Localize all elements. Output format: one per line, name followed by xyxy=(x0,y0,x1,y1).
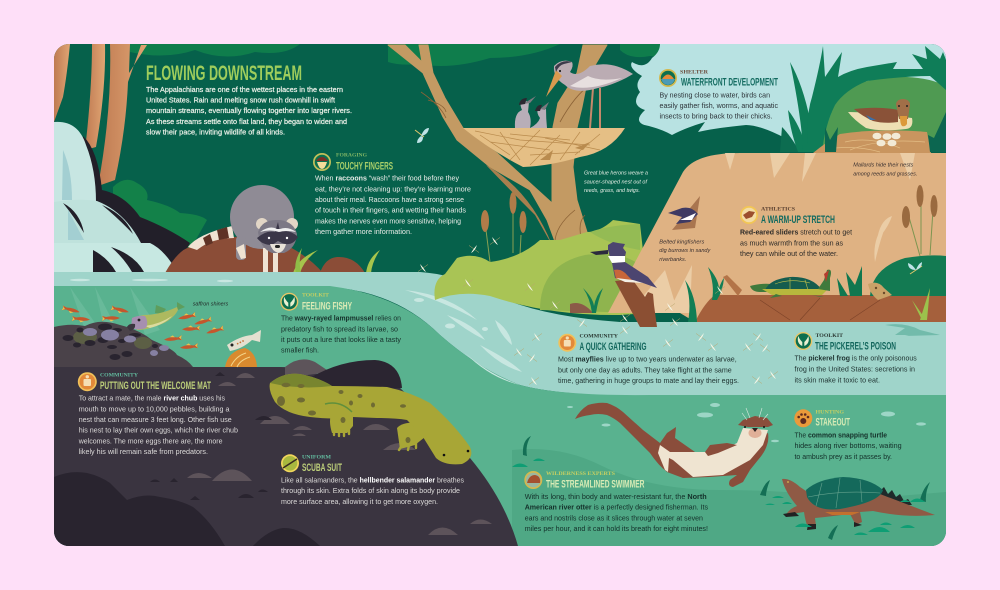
section: putting out the welcome mat: COMMUNITY xyxy=(100,372,138,378)
section: feeling fishy: predatory fish to spread its larvae, so xyxy=(281,324,398,334)
pebble pile xyxy=(54,322,193,367)
heron caption: saucer-shaped nest out of xyxy=(584,179,648,185)
section: touchy fingers: When raccoons “wash” their food before they xyxy=(315,174,459,183)
mayfly swarm xyxy=(418,237,778,385)
great blue heron xyxy=(546,61,633,128)
section: touchy fingers: of touch in their fingers, and wetting their hands xyxy=(315,206,466,215)
raccoon xyxy=(188,185,298,273)
bush on bank xyxy=(837,255,946,320)
river otter xyxy=(575,403,773,487)
section: the streamlined swimmer: American river otter is a perfectly designed fisherman. Its xyxy=(525,503,708,512)
section: a quick gathering: Most mayflies live up to two years underwater as larvae, xyxy=(558,355,737,364)
intro text: slow their pace, inviting wildlife of all kinds. xyxy=(146,127,285,136)
upper river band xyxy=(54,272,946,396)
section: the streamlined swimmer: miles per hour, and it can hold its breath for eight minutes! xyxy=(525,524,708,533)
saffron shiners xyxy=(61,305,224,350)
section: feeling fishy: FEELING FISHY xyxy=(302,300,352,312)
kingfisher caption: riverbanks. xyxy=(659,257,686,263)
saffron shiners caption: saffron shiners xyxy=(193,301,228,307)
section: scuba suit: more surface area, allowing it to get more oxygen. xyxy=(281,497,438,506)
background forest xyxy=(54,44,946,546)
nest xyxy=(463,128,625,167)
section: touchy fingers: about their meal. Raccoons have a strong sense xyxy=(315,195,464,204)
mallard caption xyxy=(853,163,917,178)
cattails on bank xyxy=(902,185,938,256)
section: waterfront development: easily gather fish, worms, and aquatic xyxy=(660,101,778,110)
wavy-rayed lampmussel and lure xyxy=(225,330,261,367)
lower riverbed xyxy=(512,449,946,546)
hellbender salamander xyxy=(270,374,471,464)
heron caption: Great blue herons weave a xyxy=(584,171,648,177)
kingfisher on stump xyxy=(590,242,657,288)
section: a warm-up stretch: ATHLETICS xyxy=(761,206,795,212)
kingfisher caption xyxy=(659,239,711,263)
underwater mid layer xyxy=(54,286,946,546)
section: a warm-up stretch: they can while out of the water. xyxy=(740,249,838,258)
foraging dragonfly xyxy=(415,128,429,143)
bank grass tufts xyxy=(640,153,915,313)
section: the pickerel's poison xyxy=(794,332,917,384)
kingfisher caption: dig burrows in sandy xyxy=(659,248,711,254)
section: waterfront development xyxy=(659,69,778,120)
ground stones xyxy=(150,372,492,535)
intro text: As these streams settle onto flat land, they began to widen and xyxy=(146,117,347,126)
section: putting out the welcome mat: mouth to move up to 10,000 pebbles, building a xyxy=(79,404,230,414)
cattails xyxy=(481,192,526,262)
section: waterfront development: insects to bring back to their chicks. xyxy=(660,112,772,120)
section: waterfront development: By nesting close to water, birds can xyxy=(660,90,770,99)
section: stakeout: hides along river bottoms, waiting xyxy=(794,441,902,450)
section: a quick gathering: but only one day as adults. They take flight at the same xyxy=(558,366,732,374)
section: scuba suit: UNIFORM xyxy=(302,454,332,460)
section: touchy fingers: TOUCHY FINGERS xyxy=(336,160,393,172)
section: touchy fingers: eat, they’re not cleaning up: they’re learning more xyxy=(315,184,471,194)
grasses at top right xyxy=(780,46,946,152)
red-eared slider turtle xyxy=(750,270,831,298)
section: stakeout: HUNTING xyxy=(816,409,845,415)
right grass tufts xyxy=(825,112,946,152)
intro text: mountain streams, eventually flowing together into larger rivers. xyxy=(146,106,352,115)
kingfisher head in burrow xyxy=(668,196,700,230)
heron caption: reeds, grass, and twigs. xyxy=(584,188,640,194)
section: the streamlined swimmer: THE STREAMLINED SWIMMER xyxy=(546,478,645,490)
section: the streamlined swimmer: WILDERNESS EXPERTS xyxy=(546,471,615,477)
section: feeling fishy: smaller fish. xyxy=(281,346,319,355)
kingfisher caption: Belted kingfishers xyxy=(659,239,705,245)
section: putting out the welcome mat: nest that can measure 3 feet long. Other fish use xyxy=(79,415,232,424)
section: stakeout xyxy=(794,409,902,461)
intro text: United States. Rain and melting snow rush downhill in swift xyxy=(146,96,336,105)
section: feeling fishy xyxy=(280,293,401,355)
section: a warm-up stretch: A WARM-UP STRETCH xyxy=(761,214,835,226)
brown rocks xyxy=(165,237,365,273)
section: touchy fingers: makes the nerves even more sensitive, helping xyxy=(315,216,461,226)
title: FLOWING DOWNSTREAM xyxy=(146,62,302,85)
bank pale leaves xyxy=(874,216,892,262)
sandy bank xyxy=(608,153,946,322)
section: a quick gathering xyxy=(558,334,739,385)
section: the pickerel's poison: frog in the United States: secretions in xyxy=(794,364,915,374)
section: the streamlined swimmer: ears and nostrils close as it slices through water at seven xyxy=(525,514,703,522)
section: putting out the welcome mat: welcomes. The more eggs there are, the more xyxy=(78,436,222,445)
heron chicks xyxy=(515,96,549,128)
mallard nest with eggs xyxy=(813,130,931,153)
bush behind waterfall xyxy=(113,180,207,250)
background trees xyxy=(54,44,147,186)
foreground dark hills xyxy=(54,472,320,546)
bank frog xyxy=(868,283,892,300)
main tree xyxy=(388,45,607,262)
water plants xyxy=(512,436,930,540)
wood log xyxy=(695,275,946,322)
river highlights xyxy=(70,279,522,385)
section: waterfront development: WATERFRONT DEVELOPMENT xyxy=(681,77,778,89)
section: putting out the welcome mat: To attract a mate, the male river chub uses his xyxy=(79,394,225,403)
dark rock ground xyxy=(54,327,518,546)
section: a warm-up stretch: Red-eared sliders stretch out to get xyxy=(740,228,853,237)
section: the pickerel's poison: The pickerel frog is the only poisonous xyxy=(794,354,917,363)
section: putting out the welcome mat: PUTTING OUT THE WELCOME MAT xyxy=(100,380,211,392)
rear rock behind salamander xyxy=(285,359,402,392)
section: the pickerel's poison: TOOLKIT xyxy=(816,333,843,339)
section: a quick gathering: time, gathering in huge groups to mate and lay their eggs. xyxy=(558,376,739,385)
bush under sky xyxy=(643,122,782,152)
green hillside xyxy=(434,220,650,315)
section: a quick gathering: A QUICK GATHERING xyxy=(580,341,646,353)
section: feeling fishy: The wavy-rayed lampmussel relies on xyxy=(281,314,401,323)
common snapping turtle xyxy=(782,477,935,530)
mallard caption: Mallards hide their nests xyxy=(853,163,913,169)
light shafts xyxy=(70,288,160,335)
waterfall xyxy=(54,122,177,272)
section: feeling fishy: it puts out a lure that looks like a tasty xyxy=(281,335,401,344)
mallard caption: among reeds and grasses. xyxy=(853,172,917,178)
section: putting out the welcome mat xyxy=(78,372,238,456)
section: scuba suit xyxy=(281,454,464,506)
heron caption xyxy=(584,171,648,194)
section: touchy fingers: FORAGING xyxy=(336,152,368,158)
section: feeling fishy: TOOLKIT xyxy=(302,293,329,299)
section: stakeout: STAKEOUT xyxy=(816,417,850,429)
section: the pickerel's poison: its skin make it toxic to eat. xyxy=(794,376,880,384)
water bubbles xyxy=(567,403,926,442)
section: putting out the welcome mat: likely his will remain safe from predators. xyxy=(79,447,208,456)
section: scuba suit: SCUBA SUIT xyxy=(302,462,342,474)
waterfall rocks xyxy=(83,136,190,273)
river chub xyxy=(127,302,185,331)
section: the streamlined swimmer: With its long, thin body and water-resistant fur, the North xyxy=(525,492,707,501)
section: a quick gathering: COMMUNITY xyxy=(580,334,618,340)
section: stakeout: The common snapping turtle xyxy=(794,430,887,439)
dragonfly near bush xyxy=(908,262,922,274)
section: touchy fingers xyxy=(313,152,471,236)
water lily patches xyxy=(885,324,940,336)
mallard duck xyxy=(848,99,912,130)
section: a warm-up stretch: as much warmth from the sun as xyxy=(740,238,843,247)
section: putting out the welcome mat: his nest to lay their own eggs, which the river chub xyxy=(79,426,238,435)
section: stakeout: to ambush prey as it passes by. xyxy=(794,452,892,461)
section: a warm-up stretch xyxy=(740,206,853,258)
intro text xyxy=(146,85,352,136)
reeds by rocks xyxy=(293,248,380,273)
section: scuba suit: through its skin. Extra folds of skin along its body provide xyxy=(281,486,460,495)
section: the streamlined swimmer xyxy=(524,471,708,533)
intro text: The Appalachians are one of the wettest places in the eastern xyxy=(146,85,343,94)
section: scuba suit: Like all salamanders, the hellbender salamander breathes xyxy=(281,475,464,484)
section: the pickerel's poison: THE PICKEREL’S POISON xyxy=(815,340,896,352)
sky clearing xyxy=(631,44,946,152)
canopy foliage xyxy=(130,44,690,66)
section: touchy fingers: them gather more information. xyxy=(315,227,412,236)
stump and grass xyxy=(570,267,724,327)
section: waterfront development: SHELTER xyxy=(680,69,709,75)
